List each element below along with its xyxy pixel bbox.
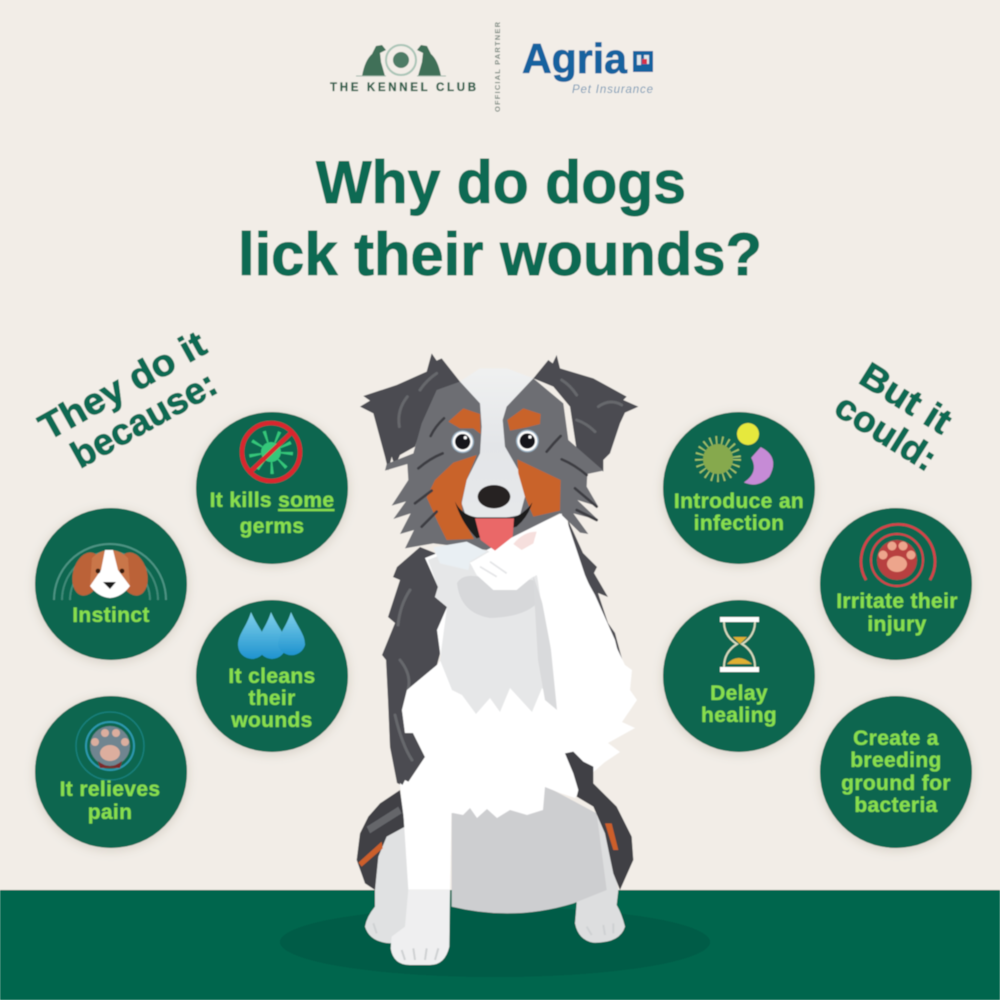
ear highlights	[399, 373, 622, 432]
hind fringes and front leg	[357, 752, 633, 965]
panel: irritate injury: Irritate their	[836, 590, 958, 613]
panel: cleans wounds	[196, 600, 348, 752]
mouth	[455, 502, 532, 538]
panel: relieves pain: It relieves	[60, 778, 160, 801]
heading: But it could: But it	[853, 354, 959, 442]
panel: irritate injury	[820, 508, 972, 660]
logo: Agria Pet Insurance	[522, 35, 653, 96]
panel: breeding ground: bacteria	[854, 794, 938, 817]
white foreleg	[470, 513, 630, 760]
panel: relieves pain: pain	[88, 801, 132, 824]
head	[360, 353, 638, 590]
foreleg shadow	[533, 575, 557, 710]
logo: The Kennel Club: THE KENNEL CLUB	[330, 82, 476, 94]
heading: But it could: could:	[828, 385, 944, 479]
panel: introduce infection: infection	[694, 512, 784, 535]
title: Why do dogs	[316, 149, 686, 216]
left side dark fur	[382, 547, 450, 787]
panel: delay healing: healing	[701, 704, 777, 727]
panel: instinct	[35, 508, 187, 660]
panel: delay healing	[663, 600, 815, 752]
panel: breeding ground: ground for	[841, 772, 951, 795]
dog illustration	[357, 353, 638, 965]
title: lick their wounds?	[238, 221, 762, 288]
panel: kills some germs	[196, 412, 348, 564]
chest shadow	[457, 576, 540, 618]
icon: red paw	[861, 524, 935, 586]
eyes	[451, 430, 539, 453]
panel: delay healing: Delay	[710, 682, 768, 705]
panel: irritate injury: injury	[867, 613, 927, 636]
head blaze	[460, 368, 533, 520]
icon: germs	[700, 423, 772, 483]
icon: hourglass	[720, 617, 759, 672]
logo: Agria Pet Insurance: Pet Insurance	[572, 84, 653, 96]
circle shadows	[34, 413, 973, 851]
right ear	[533, 355, 638, 472]
panel: cleans wounds: It cleans	[228, 665, 316, 688]
nose	[478, 485, 510, 508]
right side dark fur	[568, 520, 625, 670]
ground band	[0, 890, 1000, 1000]
panel: kills some germs: germs	[240, 515, 304, 538]
white torso	[400, 515, 637, 820]
panel: breeding ground: Create a	[853, 727, 939, 750]
panel: introduce infection	[663, 412, 815, 564]
paw	[433, 513, 567, 590]
panel: relieves pain	[35, 696, 187, 848]
grey chest	[428, 547, 552, 714]
icon: water drops	[238, 612, 305, 659]
left ear	[360, 353, 460, 471]
logo: The Kennel Club	[330, 45, 476, 94]
dark fur highlights	[395, 590, 412, 760]
panel: breeding ground: breeding	[850, 749, 942, 772]
panel: breeding ground	[820, 696, 972, 848]
icon: crossed-out germ	[242, 423, 300, 481]
panel: cleans wounds: wounds	[230, 709, 313, 732]
panel: introduce infection: Introduce an	[674, 490, 804, 513]
ground shadow	[280, 907, 710, 977]
belly and hind legs	[365, 787, 625, 953]
official partner label: OFFICIAL PARTNER	[493, 21, 502, 112]
panel: kills some germs: It kills some	[210, 489, 334, 512]
heading: But it could	[828, 354, 959, 479]
grey mask and neck fur	[385, 378, 603, 550]
panel: instinct: Instinct	[72, 604, 150, 627]
heading: They do it because: They do it	[32, 323, 213, 448]
title	[238, 149, 762, 288]
icon: grey paw	[76, 712, 144, 780]
dark streaks	[415, 418, 597, 527]
logo: Agria Pet Insurance: Agria	[522, 35, 628, 82]
heading: They do it because: because:	[64, 363, 224, 476]
tongue	[475, 518, 514, 551]
panel: cleans wounds: their	[248, 687, 296, 710]
icon: dog head with rings	[54, 544, 166, 600]
tan markings	[427, 408, 561, 540]
